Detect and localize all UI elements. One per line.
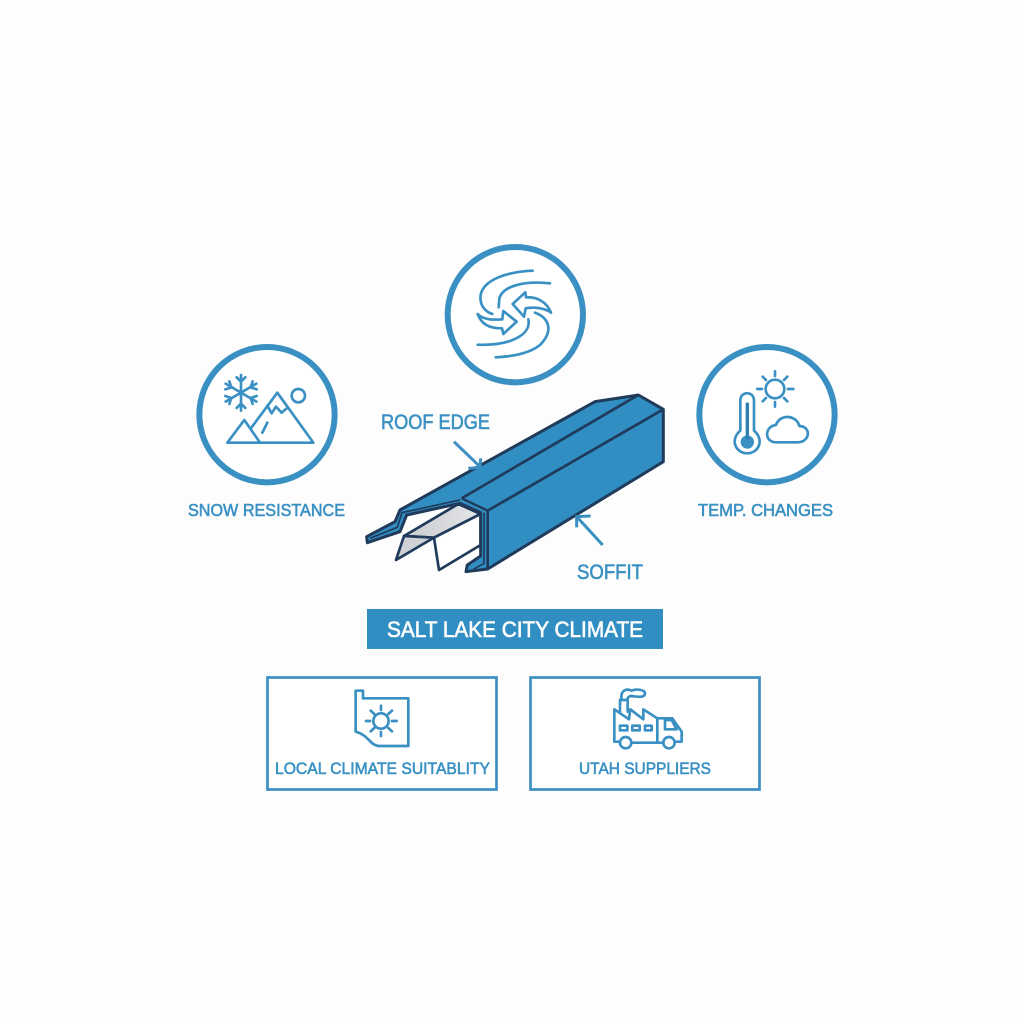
profile fold lines — [370, 395, 663, 569]
roof edge arrow — [454, 442, 481, 468]
label: local climate suitability: LOCAL CLIMATE SUITABLITY — [275, 759, 490, 778]
temperature changes icon badge — [699, 347, 835, 482]
snow resistance label: SNOW RESISTANCE — [188, 500, 345, 520]
icon: factory truck — [614, 690, 682, 748]
banner: Salt Lake City Climate: SALT LAKE CITY CLIMATE — [387, 617, 643, 642]
temp changes label: TEMP. CHANGES — [698, 500, 833, 520]
roof edge label: ROOF EDGE — [381, 411, 490, 434]
panel: Utah suppliers — [530, 678, 760, 790]
soffit arrow — [577, 516, 603, 545]
snow resistance icon badge — [199, 347, 335, 482]
panel: local climate suitability — [268, 678, 496, 790]
soffit label: SOFFIT — [577, 561, 643, 584]
label: Utah suppliers: UTAH SUPPLIERS — [579, 759, 711, 778]
wind icon badge — [448, 247, 583, 382]
blue metal body — [367, 395, 663, 572]
icon: state map with sun — [356, 691, 408, 746]
roof edge and soffit profile diagram — [367, 395, 663, 572]
inner grey and white channel — [396, 504, 481, 570]
banner: Salt Lake City Climate — [367, 609, 663, 649]
